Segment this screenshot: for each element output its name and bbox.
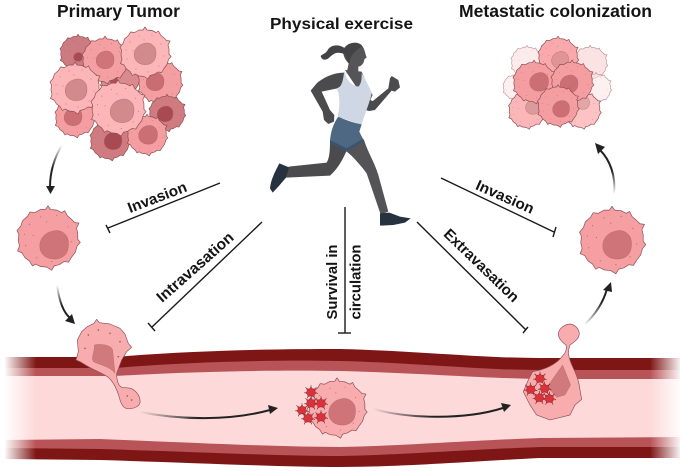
label: Intravasation: Intravasation [154, 229, 237, 306]
label: Extravasation: Extravasation [440, 226, 522, 306]
title: Primary Tumor: Primary Tumor [57, 1, 180, 21]
invading cell right [580, 206, 646, 274]
arrow: lumen right [373, 403, 511, 417]
inhibition line: intravasation [148, 222, 262, 331]
metastatic colony [503, 36, 612, 129]
label: Invasion right: Invasion [473, 177, 537, 218]
label: Survival in circulation: circulation [348, 244, 364, 320]
arrow: lumen left [140, 405, 278, 418]
arrow: tumor to cell [46, 145, 62, 194]
label: Survival in circulation: Survival in [325, 244, 341, 320]
arrow: extravasation to cell [584, 282, 612, 325]
label: Invasion left: Invasion [125, 179, 189, 217]
title: Metastatic colonization: Metastatic colonization [459, 1, 652, 21]
blood vessel [4, 349, 682, 467]
label: Survival in circulation [325, 244, 364, 320]
inhibition line: extravasation [417, 222, 528, 333]
primary tumor cell cluster [50, 27, 186, 161]
inhibition line: invasion left [106, 183, 220, 233]
runner figure [270, 43, 411, 226]
intravasating cell [76, 319, 140, 409]
circulating tumor cell with platelets [295, 378, 367, 438]
inhibition line: survival [338, 207, 351, 333]
invading cell left [17, 206, 80, 270]
arrow: cell to colony [595, 143, 614, 194]
inhibition line: invasion right [441, 178, 556, 237]
title: Physical exercise: Physical exercise [270, 16, 413, 33]
arrow: cell to intravasation [57, 285, 75, 324]
extravasating cell [523, 324, 582, 420]
